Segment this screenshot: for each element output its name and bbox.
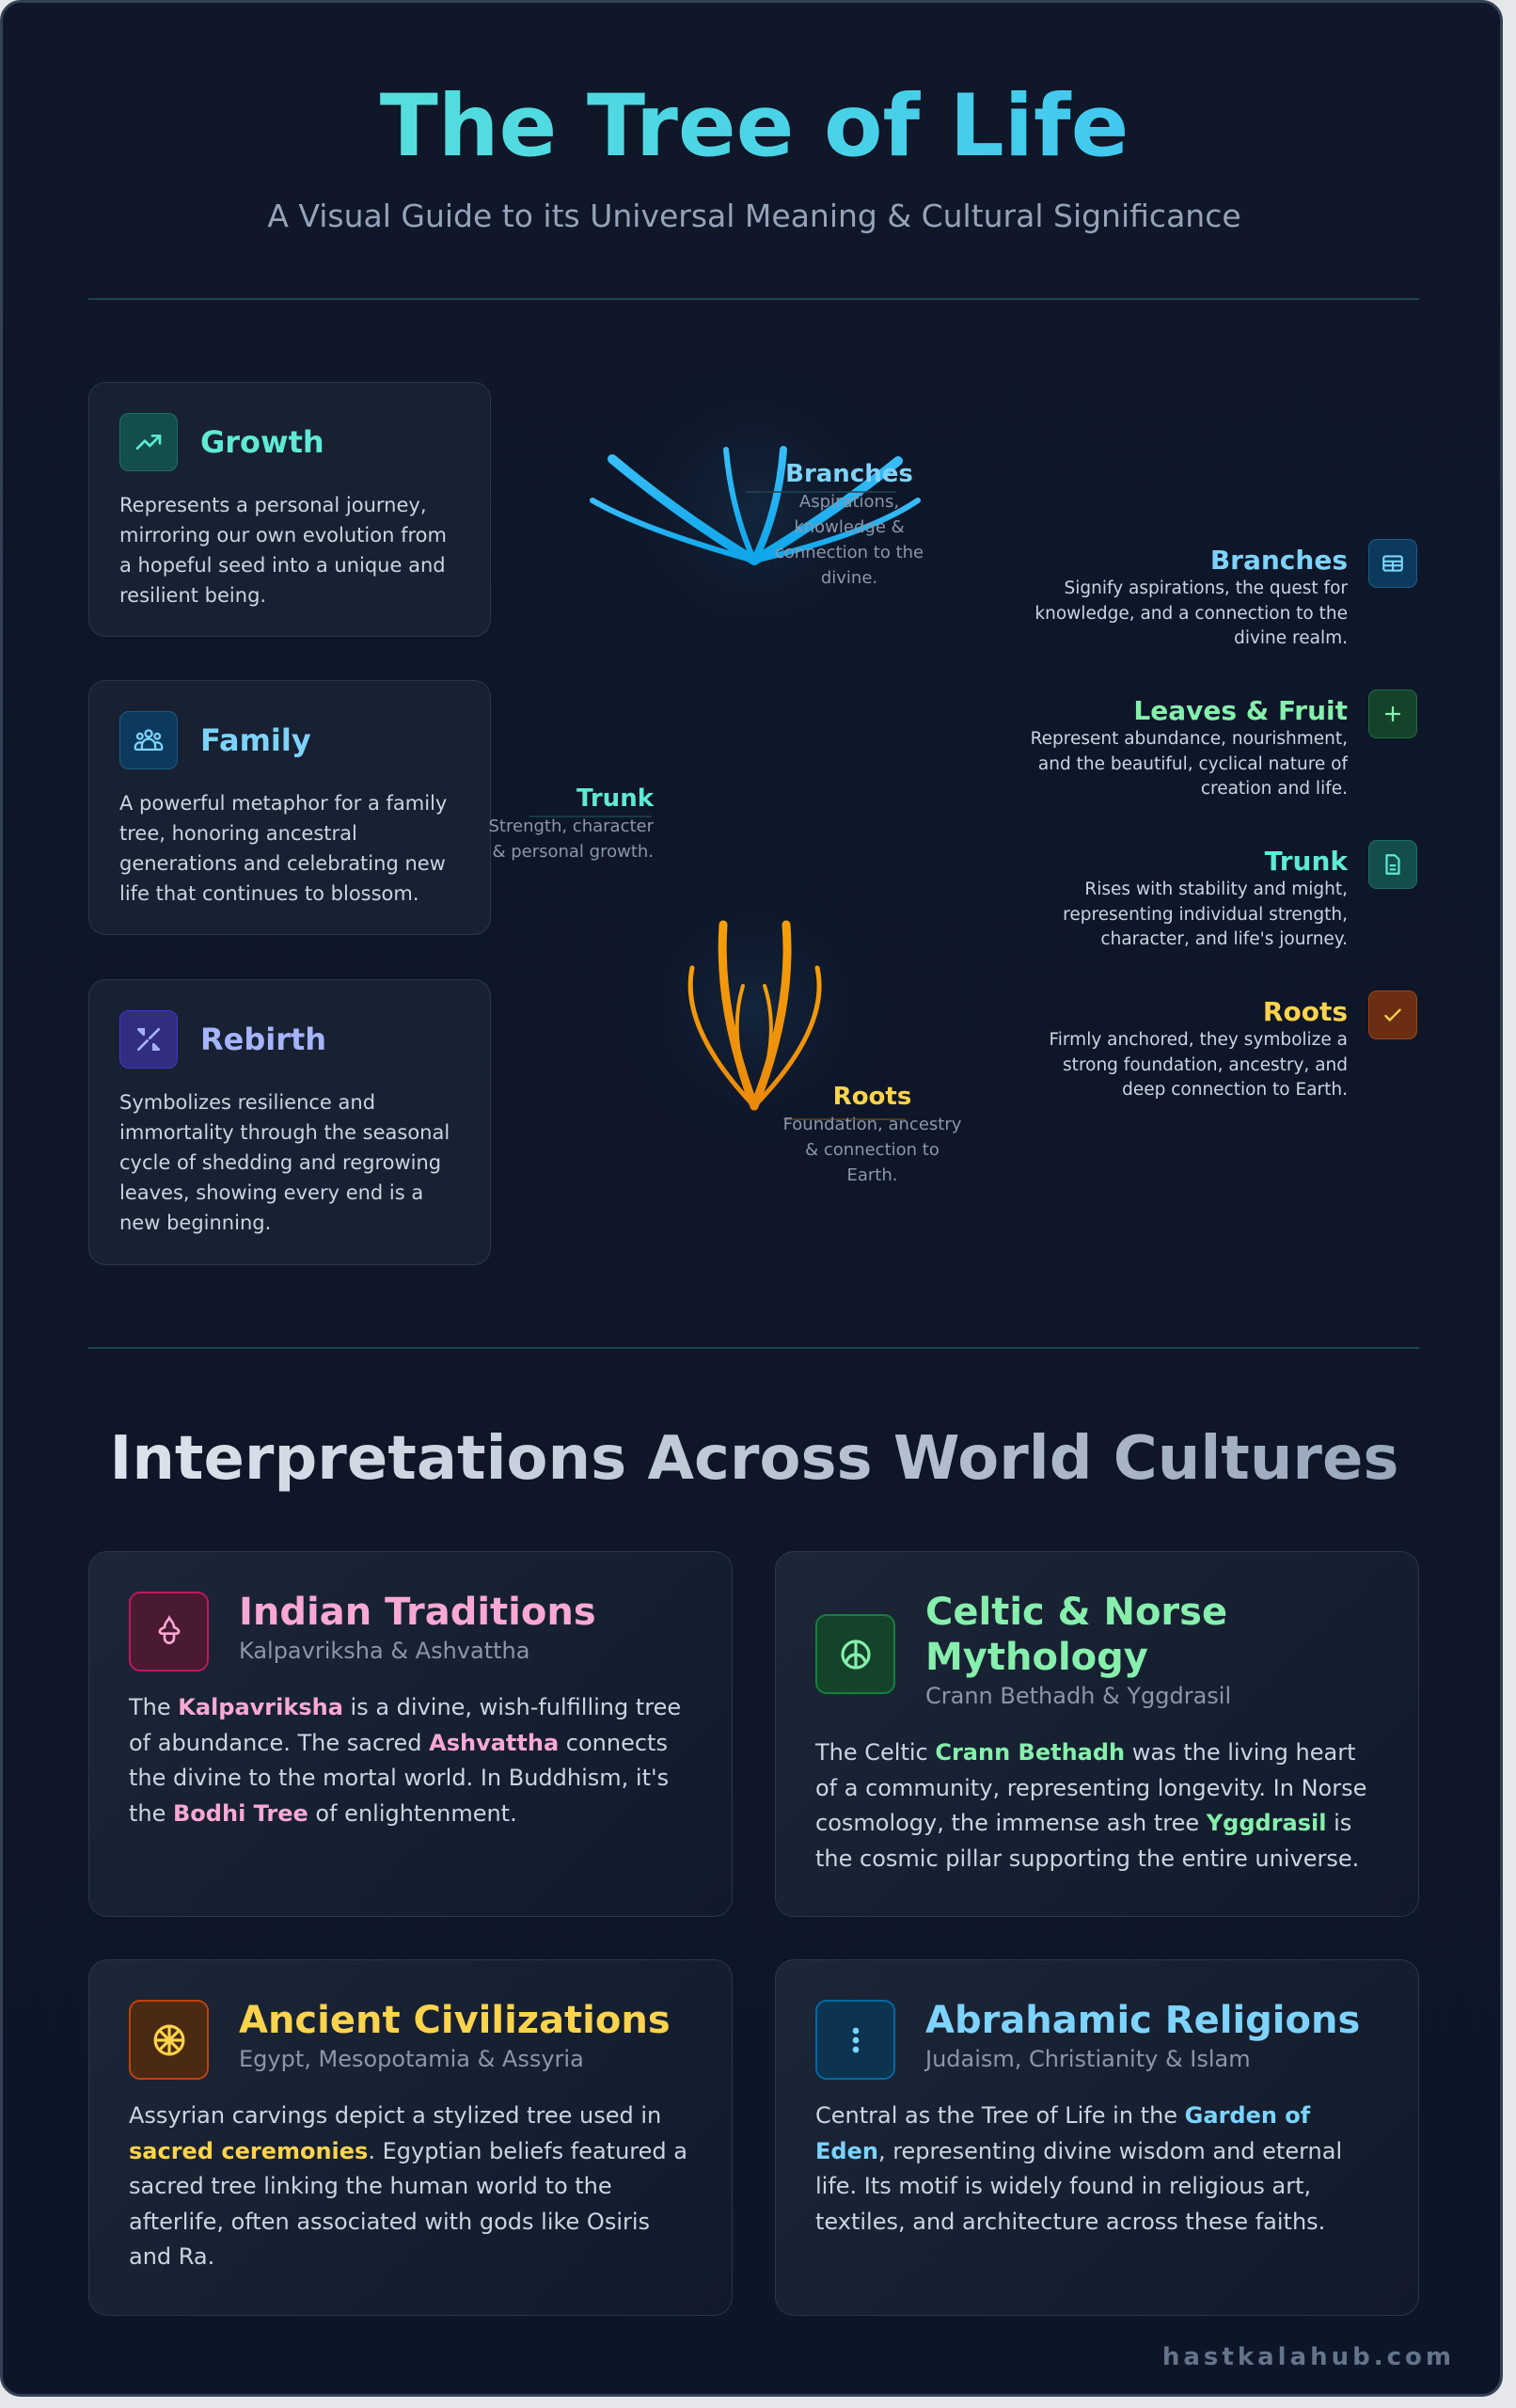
panel: celtic & norse: Crann Bethadh & Yggdrasil	[925, 1683, 1231, 1709]
heading: growth: Growth	[200, 424, 324, 460]
tree label: trunk	[489, 784, 655, 862]
right item: trunk: Rises with stability and might, representing individual strength, character, and life's journey.	[1063, 879, 1348, 949]
panel: abrahamic religions: Judaism, Christianity & Islam	[925, 2046, 1251, 2072]
right item: branches	[1034, 539, 1417, 648]
icon: ancient	[129, 2000, 209, 2080]
title: The Tree of Life	[380, 77, 1129, 176]
text: rebirth: Symbolizes resilience and immortality through the seasonal cycle of shedding and regrowing leaves, showing every end is a new beginning.	[119, 1091, 450, 1234]
right item: branches: Branches	[1210, 545, 1348, 576]
roots	[690, 925, 819, 1106]
text: family: A powerful metaphor for a family tree, honoring ancestral generations and celebrating new life that continues to blossom.	[119, 792, 447, 905]
right item: leaves & fruit	[1031, 689, 1417, 799]
panel: indian traditions: Indian Traditions	[239, 1591, 596, 1634]
panel: ancient civilizations: Ancient Civilizations	[239, 1999, 671, 2042]
panel: indian traditions	[88, 1551, 733, 1917]
panel: rebirth	[88, 979, 491, 1265]
icon: growth	[119, 413, 178, 471]
panel: growth	[88, 382, 491, 637]
right item: roots: Roots	[1263, 996, 1348, 1027]
right item: leaves & fruit: Leaves & Fruit	[1133, 695, 1348, 726]
panel: abrahamic religions	[775, 1959, 1419, 2316]
panel: ancient civilizations	[88, 1959, 733, 2316]
panel: indian traditions: The Kalpavriksha is a divine, wish-fulfilling tree of abundance. The sacred Ashvattha connects the divine to the mortal world. In Buddhism, it's the Bodhi Tree of enlightenment.	[129, 1694, 681, 1827]
heading: family: Family	[200, 722, 311, 758]
panel: abrahamic religions: Central as the Tree of Life in the Garden of Eden, representing divine wisdom and eternal life. Its motif is widely found in religious art, textiles, and architecture across these faiths.	[815, 2102, 1342, 2235]
right item: roots: Firmly anchored, they symbolize a strong foundation, ancestry, and deep connection to Earth.	[1049, 1030, 1348, 1100]
right item: trunk	[1063, 840, 1417, 949]
icon: celtic	[815, 1614, 895, 1694]
title	[3, 80, 1506, 174]
tree label: roots: Foundation, ancestry & connection to Earth.	[783, 1115, 961, 1185]
right item: leaves & fruit: Represent abundance, nourishment, and the beautiful, cyclical nature of creation and life.	[1031, 729, 1348, 799]
panel: indian traditions: Kalpavriksha & Ashvattha	[239, 1638, 529, 1664]
panel: abrahamic religions: Abrahamic Religions	[925, 1999, 1360, 2042]
icon: abrahamic	[815, 2000, 895, 2080]
panel: family	[88, 680, 491, 935]
tree label: trunk: Trunk	[576, 784, 654, 813]
subtitle: A Visual Guide to its Universal Meaning & Cultural Significance	[267, 198, 1241, 234]
section heading: Interpretations Across World Cultures	[110, 1424, 1398, 1494]
panel: ancient civilizations: Assyrian carvings depict a stylized tree used in sacred ceremonies. Egyptian beliefs featured a sacred tree linking the human world to the afterlife, often associated with gods like Osiris and Ra.	[129, 2102, 687, 2270]
icon: check	[1368, 990, 1417, 1039]
tree label: trunk: Strength, character & personal growth.	[489, 816, 654, 862]
text: growth: Represents a personal journey, mirroring our own evolution from a hopeful seed into a unique and resilient being.	[119, 494, 447, 607]
panel: celtic & norse: The Celtic Crann Bethadh was the living heart of a community, representing longevity. In Norse cosmology, the immense ash tree Yggdrasil is the cosmic pillar supporting the entire universe.	[815, 1739, 1366, 1872]
icon: document	[1368, 840, 1417, 889]
icon: plus	[1368, 689, 1417, 738]
right item: trunk: Trunk	[1265, 846, 1348, 877]
panel: celtic & norse	[775, 1551, 1419, 1917]
panel: celtic & norse: Celtic & Norse Mythology	[925, 1591, 1227, 1679]
icon: family	[119, 711, 178, 769]
icon: branches	[1368, 539, 1417, 588]
icon: rebirth	[119, 1010, 178, 1069]
tree illustration	[529, 446, 921, 1120]
right item: branches: Signify aspirations, the quest for knowledge, and a connection to the divine realm.	[1034, 578, 1348, 648]
icon: indian	[129, 1592, 209, 1671]
tree label: roots	[783, 1083, 961, 1185]
panel: ancient civilizations: Egypt, Mesopotamia & Assyria	[239, 2046, 584, 2072]
right item: roots	[1049, 990, 1417, 1100]
branches	[592, 450, 918, 561]
footer: hastkalahub.com	[1162, 2343, 1455, 2371]
heading: rebirth: Rebirth	[200, 1022, 326, 1057]
tree label: branches: Aspirations, knowledge & connection to the divine.	[775, 492, 924, 588]
tree label: branches: Branches	[785, 460, 913, 488]
tree label: roots: Roots	[833, 1083, 911, 1111]
